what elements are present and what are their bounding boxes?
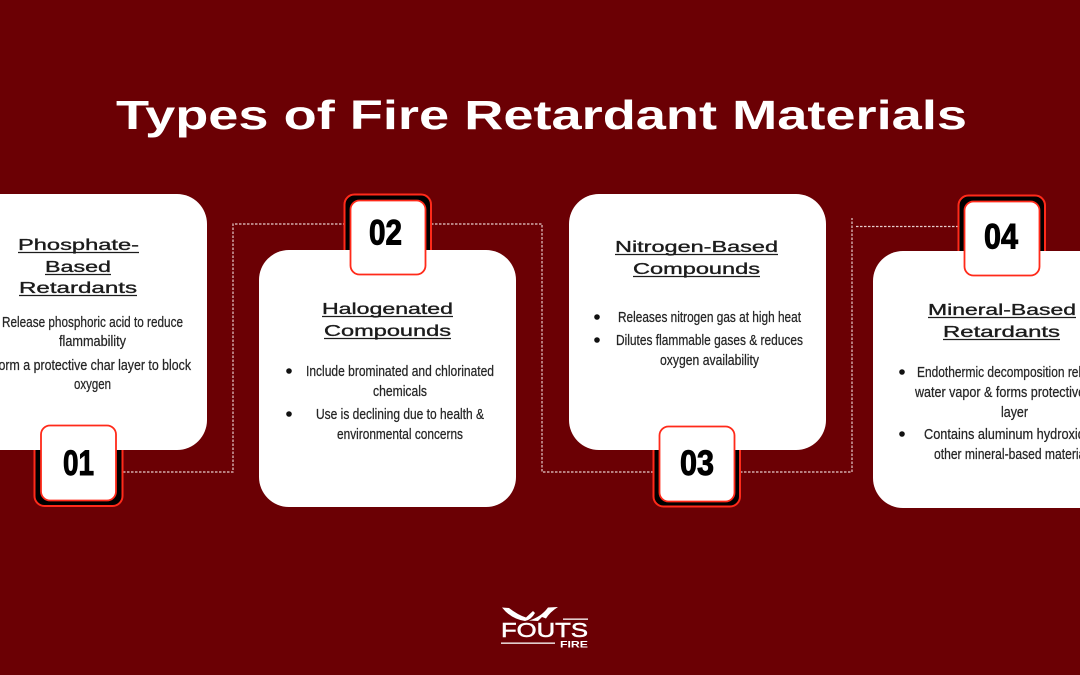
badge 02: 02 [369, 214, 402, 252]
body text: halogenated: Include brominated and chlorinated [306, 363, 494, 380]
heading: halogenated compounds [322, 301, 453, 340]
heading: halogenated compounds: Halogenated [322, 301, 453, 318]
heading: mineral-based retardants: Retardants [943, 324, 1060, 341]
body text: nitrogen [594, 309, 803, 369]
badge 04 [964, 202, 1040, 276]
body text: phosphate: oxygen [74, 376, 111, 393]
body text: halogenated: Use is declining due to health & [316, 406, 484, 423]
heading: phosphate-based retardants [18, 237, 139, 297]
body text: mineral [899, 364, 1080, 463]
icon: wings [502, 607, 558, 621]
badge 03: 03 [680, 444, 714, 483]
body text: nitrogen: Dilutes flammable gases & reduces [616, 332, 803, 349]
logo: Fouts Fire [501, 607, 588, 650]
heading: phosphate-based retardants: Retardants [19, 280, 137, 297]
heading: nitrogen-based compounds: Nitrogen-Based [615, 239, 778, 256]
badge backing 02 [344, 194, 431, 264]
heading: nitrogen-based compounds: Compounds [633, 261, 760, 278]
body text: halogenated: environmental concerns [337, 426, 463, 443]
body text: phosphate: Release phosphoric acid to reduce [2, 314, 183, 331]
body text: mineral: layer [1001, 404, 1028, 421]
badge 03 [660, 426, 734, 502]
badge 04: 04 [984, 218, 1018, 256]
panel: nitrogen-based compounds [569, 194, 826, 506]
body text: phosphate [0, 314, 191, 393]
panel: phosphate-based retardants [0, 194, 207, 506]
body text: halogenated [286, 363, 494, 443]
heading: mineral-based retardants [928, 302, 1076, 341]
badge backing 04 [958, 196, 1045, 266]
body text: halogenated: chemicals [373, 383, 427, 400]
heading: phosphate-based retardants: Phosphate- [18, 237, 139, 254]
logo: Fouts Fire: FIRE [560, 640, 588, 650]
heading: halogenated compounds: Compounds [324, 323, 451, 340]
panel: mineral-based retardants [873, 196, 1080, 508]
body text: nitrogen: oxygen availability [660, 352, 759, 369]
badge backing 01 [34, 420, 122, 506]
body text: nitrogen: Releases nitrogen gas at high heat [618, 309, 802, 326]
badge 01: 01 [63, 444, 94, 483]
panel: halogenated compounds [259, 194, 516, 507]
badge 01 [41, 426, 116, 500]
heading: mineral-based retardants: Mineral-Based [928, 302, 1076, 319]
badge backing 03 [654, 430, 740, 506]
logo: Fouts Fire: FOUTS [501, 620, 588, 642]
heading: nitrogen-based compounds [615, 239, 778, 278]
badge 02 [350, 200, 426, 274]
body text: phosphate: flammability [59, 333, 126, 350]
dashed connector lines [123, 218, 960, 472]
title: Types of Fire Retardant Materials [116, 92, 967, 138]
heading: phosphate-based retardants: Based [45, 259, 111, 276]
